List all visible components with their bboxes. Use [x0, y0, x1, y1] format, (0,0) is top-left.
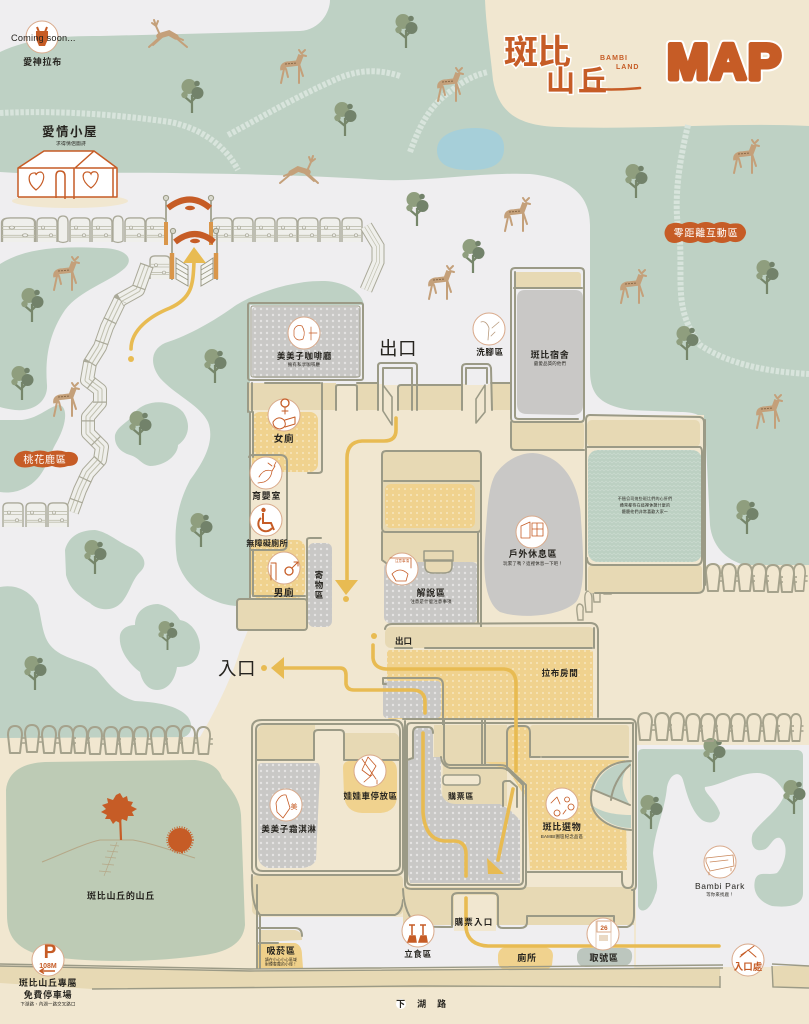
storage label: 物 [315, 580, 324, 590]
love cabin [12, 124, 128, 208]
grey lower forecourt [258, 917, 634, 968]
dorm label [531, 349, 569, 367]
ball dome [591, 761, 631, 830]
interpretation icon and label: 注意事項 [395, 558, 409, 563]
red tree small [167, 827, 193, 853]
Bambi Park icon and label: 等你來找鹿！ [706, 891, 734, 898]
self service icon and label: 立食區 [404, 949, 432, 959]
accessible restroom icon and label: 無障礙廁所 [246, 538, 288, 548]
room: male restroom floor [250, 540, 305, 598]
interpretation icon and label: 解說區 [416, 587, 446, 598]
hill contour [42, 840, 195, 862]
trees [11, 14, 806, 829]
red tree large [101, 793, 137, 840]
green blob: meadow islet 2 [65, 530, 144, 609]
green blob: meadow islet 3 [120, 604, 200, 690]
self service icon and label [402, 915, 434, 959]
foot wash icon and label [473, 313, 505, 357]
stroller icon and label [343, 755, 398, 801]
ice cream icon and label: 美 [290, 802, 298, 811]
deer [54, 20, 782, 428]
smoking area: 射煙雲霧的小徑！ [265, 962, 297, 966]
愛神拉布 label: 愛神拉布 [23, 56, 62, 67]
male restroom icon and label [268, 552, 300, 599]
road name 下湖路: 下 [396, 999, 406, 1009]
building: exit gate band [247, 363, 510, 473]
cabin heading: 愛情小屋 [42, 124, 98, 139]
hill lawn: 斑比山丘的山丘 [6, 760, 245, 961]
storage label: 寄 [315, 570, 324, 580]
ice cream icon and label: 美美子霜淇淋 [261, 824, 317, 834]
zone label: 桃花鹿區 [14, 450, 78, 468]
queue number icon [587, 918, 619, 950]
parking icon and labels: 下湖路、內湖一路交叉路口 [20, 1000, 76, 1008]
title: 斑比山丘: 斑比 [504, 34, 571, 72]
storage label [315, 570, 324, 600]
green area: left upper meadow [0, 247, 129, 410]
building: rabu room [383, 623, 598, 757]
room: storage floor [308, 543, 332, 627]
interaction hall note: 通常都待在這裡休憩什麼的 [620, 502, 670, 508]
parking icon and labels: 108M [39, 963, 57, 970]
gift shop icon and label [541, 788, 584, 840]
cream plaza ground [0, 384, 809, 1024]
outdoor lounge icon and label: 戶外休息區 [509, 548, 557, 559]
ticket hall grey floor [407, 727, 520, 883]
parking icon and labels: 免費停車場 [24, 989, 72, 1000]
accessible restroom icon and label [246, 504, 288, 548]
room: restroom walls [237, 383, 321, 630]
parking icon and labels: P [44, 942, 57, 963]
Bambi Park icon and label [695, 846, 745, 898]
female restroom icon and label [268, 399, 300, 445]
exit big label: 出口 [379, 338, 417, 359]
rabu room label: 拉布房間 [542, 668, 578, 678]
building: ticket hall tan zones [403, 719, 636, 931]
smoking area [257, 885, 303, 968]
restroom blob: 廁所 [498, 947, 553, 970]
green meadow: top and right deer areas [0, 0, 809, 565]
interaction hall note: 聽聽他們非常喜歡大家～ [622, 508, 668, 514]
Bambi Park icon and label: Bambi Park [695, 881, 745, 891]
route: exit to south arrow [335, 418, 396, 602]
pond [437, 128, 504, 170]
road name 下湖路: 路 [437, 998, 447, 1009]
title: MAP: MAP [667, 34, 783, 90]
room: female restroom floor [252, 412, 318, 472]
building: cafe block [248, 303, 363, 380]
fence: top row [2, 216, 378, 290]
building: deer interaction hall [586, 415, 705, 593]
title: MAP: MAP [667, 34, 783, 90]
interpretation icon and label: 注意是什麼注意事項 [410, 598, 452, 605]
interaction hall note [618, 495, 672, 514]
title: 斑比山丘 [504, 34, 640, 98]
road name 下湖路: 湖 [417, 998, 427, 1009]
entrance icon and label [732, 944, 764, 976]
route: rabu room to gift arrow [371, 633, 516, 874]
green area: peach deer meadow [0, 405, 65, 493]
coming soon text: Coming soon... [11, 33, 76, 43]
gate: main entrance arches [163, 195, 219, 286]
zone label: 零距離互動區 [664, 222, 746, 243]
gift shop icon and label: BAMBI園區紀念品區 [541, 833, 584, 840]
pickets: right upper [706, 564, 808, 592]
gift shop yellow floor [485, 727, 627, 870]
dorm label: 最愛品質的他們 [534, 360, 566, 367]
route: entrance walk arrow [128, 247, 206, 362]
building: outdoor lounge [484, 453, 583, 616]
foot wash icon and label: 洗腳區 [476, 347, 504, 357]
pebble paths [0, 71, 809, 374]
cafe icon and label [277, 317, 332, 368]
exit small label: 出口 [395, 636, 412, 646]
building: dormitory [511, 268, 584, 450]
BAMBI LAND wordmark: BAMBI [600, 55, 628, 62]
nursing room icon and label [250, 457, 282, 501]
green area: central meadow [153, 281, 364, 606]
title: 斑比山丘: LAND [616, 64, 639, 71]
hill steps [99, 842, 119, 876]
interaction hall note: 不過公司這些斑比們的心肝們 [618, 495, 672, 501]
ticket entrance label: 購票入口 [455, 917, 493, 927]
restroom blob: 廁所: 廁所 [517, 952, 537, 963]
cream header panel [485, 0, 809, 128]
pickets: right lower [638, 713, 804, 741]
entrance big label: 入口 [218, 658, 256, 679]
storage label: 區 [315, 590, 324, 600]
male restroom icon and label: 男廁 [274, 587, 294, 599]
building: interpretation hall [382, 451, 481, 630]
pickets: small stair [577, 575, 611, 620]
route: exit loop arrow [261, 657, 425, 713]
stroller icon and label: 娃娃車停放區 [343, 791, 398, 801]
green blob: meadow islet 1 [115, 402, 188, 466]
dorm label: 斑比宿舍 [531, 349, 569, 360]
ticket number blob: 取號區 [577, 948, 632, 967]
entrance icon and label: 入口處 [734, 961, 763, 973]
ticket number blob: 取號區: 取號區 [589, 952, 619, 963]
zone label: 桃花鹿區: 桃花鹿區 [23, 453, 67, 466]
pickets: bottom left [8, 725, 213, 754]
route: ticket hall path [423, 733, 466, 876]
building: ice cream hall [252, 720, 403, 915]
road name 下湖路 [396, 998, 447, 1009]
title underline [585, 88, 640, 90]
route: ticket entry path [466, 898, 719, 946]
green area: lower left meadow [0, 586, 191, 738]
ice cream icon and label [261, 789, 317, 834]
parking icon and labels: 斑比山丘專屬 [19, 977, 77, 988]
smoking label: 吸菸區 [266, 945, 296, 956]
cafe icon and label: 美美子咖啡廳 [277, 351, 332, 361]
exit gate doors [383, 385, 485, 425]
cafe icon and label: 擁有私享咖啡廳 [288, 361, 320, 368]
cabin sub heading: 求得情侶圖詩 [56, 140, 86, 147]
icon: 愛神拉布 coming soon [11, 21, 76, 67]
green area: Bambi Park meadow [638, 749, 803, 911]
female restroom icon and label: 女廁 [274, 433, 294, 445]
fence: left diagonal [3, 256, 170, 527]
outdoor lounge icon and label [503, 516, 563, 567]
parking icon and labels [19, 942, 77, 1008]
outdoor lounge icon and label: 玩累了嗎？這裡休息一下吧！ [503, 560, 563, 567]
hill label: 斑比山丘的山丘 [87, 890, 155, 901]
ticket area label: 購票區 [448, 791, 474, 801]
title: 斑比山丘: 山丘 [546, 65, 610, 98]
nursing room icon and label: 育嬰室 [252, 490, 281, 501]
smoking note: 請在小心小心區域 [265, 957, 297, 962]
gift shop icon and label: 斑比選物 [543, 821, 581, 832]
grey lawn base: Bambi Park [636, 745, 809, 967]
queue number icon: 26 [600, 925, 608, 932]
cabin [18, 151, 117, 199]
cabin ground shadow [12, 194, 128, 208]
zone label: 零距離互動區: 零距離互動區 [674, 226, 738, 240]
road [0, 964, 809, 989]
interpretation icon and label [386, 553, 452, 605]
